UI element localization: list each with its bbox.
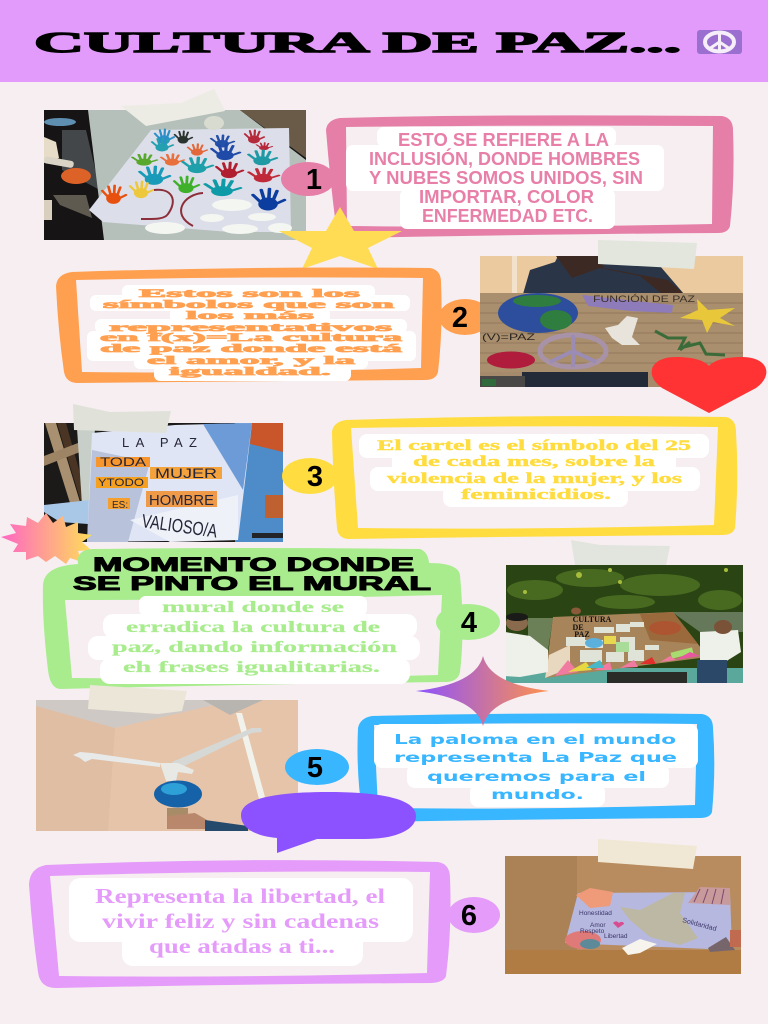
panel 5: dove: queremos para el: [427, 769, 646, 785]
header band: [0, 0, 768, 82]
icon: burst: [1, 513, 92, 564]
panel 1: inclusion: [326, 115, 734, 238]
panel 4: mural: [43, 548, 462, 689]
badge 2: 2: [452, 302, 468, 334]
speech bubble: [241, 792, 416, 853]
tape 3: [73, 404, 171, 433]
panel 4: mural: paz, dando información: [112, 639, 397, 656]
panel 1: inclusion: ESTO SE REFIERE A LA: [398, 130, 609, 150]
photo 3: poster: TODA: [100, 455, 146, 469]
photo 2: string art: (V)=PAZ: [482, 332, 536, 342]
photo 4: mural with students: CULTURA: [573, 615, 612, 624]
photo 3: poster: ES:: [112, 500, 128, 511]
photo 3: poster: YTODO: [98, 477, 145, 489]
photo 5: dove on globe: [36, 700, 298, 831]
panel 2: symbols: Estos son los: [139, 288, 362, 300]
tape 2: [598, 240, 697, 269]
photo 3: poster: [44, 423, 283, 543]
panel 2: symbols: de paz donde está: [100, 343, 403, 355]
badge 4: [436, 604, 500, 640]
panel 6: freedom: vivir feliz y sin cadenas: [102, 909, 379, 933]
photo 2: string art: FUNCIÓN DE PAZ: [593, 294, 696, 304]
panel 4: mural: erradica la cultura de: [126, 619, 380, 636]
photo 2: string art: [480, 256, 743, 387]
badge 4: 4: [461, 607, 477, 639]
panel 1: inclusion: IMPORTAR, COLOR: [419, 187, 594, 207]
photo 6: dove poster: Solidaridad: [681, 917, 717, 933]
panel 1: inclusion: ENFERMEDAD ETC.: [422, 206, 593, 226]
photo 6: dove poster: Honestidad: [579, 910, 612, 917]
photo 3: poster: LA PAZ: [122, 435, 197, 450]
badge 1: 1: [306, 164, 322, 196]
photo 4: mural with students: PAZ: [574, 630, 590, 639]
photo 3: poster: HOMBRE: [149, 492, 214, 509]
panel 1: inclusion: Y NUBES SOMOS UNIDOS, SIN: [369, 168, 643, 188]
photo 1: painted hands: [44, 110, 306, 240]
icon: heart: [652, 357, 766, 413]
icon: diamond sparkle: [416, 656, 549, 726]
panel 3: poster: El cartel es el símbolo del 25: [377, 438, 691, 454]
photo 6: dove poster: Amor: [590, 922, 606, 929]
tape 6: [598, 839, 697, 869]
panel 6: freedom: que atadas a ti...: [149, 934, 335, 958]
panel 5: dove: [358, 713, 714, 822]
panel 6: freedom: [29, 860, 450, 988]
panel 5: dove: representa La Paz que: [394, 750, 677, 766]
panel 2: symbols: representativos: [109, 322, 394, 334]
badge 5: 5: [307, 752, 323, 784]
panel 2: symbols: símbolos que son: [103, 299, 396, 311]
badge 2: [439, 299, 491, 335]
badge 1: [281, 162, 335, 196]
panel 2: symbols: igualdad.: [169, 366, 331, 378]
tape 5: [88, 685, 187, 714]
panel 2: symbols: el amor, y la: [147, 355, 356, 367]
icon: star: [279, 207, 402, 269]
heading: mural moment: SE PINTO EL MURAL: [73, 574, 432, 595]
panel 5: dove: La paloma en el mundo: [394, 732, 676, 748]
photo 6: dove poster: Respeto: [580, 928, 605, 935]
photo 6: dove poster: [505, 856, 741, 974]
badge 6: [448, 897, 500, 933]
photo 4: mural with students: [506, 565, 743, 683]
tape 4: [571, 540, 670, 565]
badge 3: 3: [307, 461, 323, 493]
panel 2: symbols: los más: [186, 310, 316, 322]
heading: mural moment: [73, 555, 432, 595]
panel 2: symbols: en f(x)=La cultura: [100, 332, 403, 344]
photo 6: dove poster: Libertad: [604, 933, 628, 940]
panel 3: poster: [332, 416, 737, 539]
icon: peace sign: [697, 30, 742, 54]
panel 3: poster: de cada mes, sobre la: [413, 454, 656, 470]
heading: mural moment: MOMENTO DONDE: [93, 555, 414, 576]
panel 2: symbols: [56, 268, 442, 383]
panel 6: freedom: Representa la libertad, el: [95, 884, 385, 908]
panel 1: inclusion: INCLUSIÓN, DONDE HOMBRES: [369, 148, 640, 169]
badge 6: 6: [461, 900, 477, 932]
panel 3: poster: violencia de la mujer, y los: [387, 471, 682, 487]
badge 3: [282, 458, 338, 494]
badge 5: [285, 749, 349, 785]
title: CULTURA DE PAZ...: [34, 27, 681, 59]
panel 5: dove: mundo.: [491, 787, 584, 803]
photo 4: mural with students: DE: [572, 623, 584, 632]
tape 1: [121, 89, 225, 126]
panel 4: mural: eh frases igualitarias.: [123, 659, 380, 676]
panel 3: poster: feminicidios.: [461, 487, 611, 503]
photo 3: poster: MUJER: [155, 465, 217, 481]
panel 4: mural: mural donde se: [162, 599, 344, 616]
